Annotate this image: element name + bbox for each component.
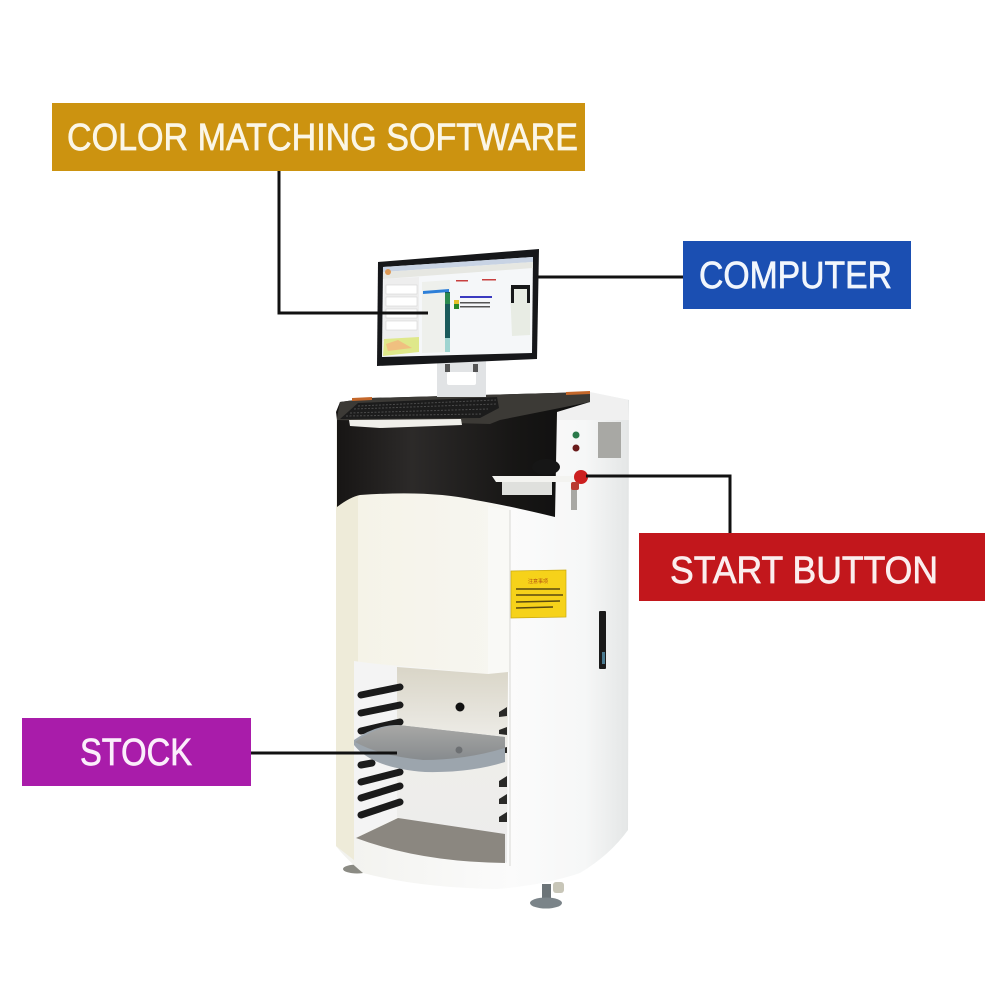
left body strip <box>336 495 358 860</box>
cabinet body <box>336 392 629 889</box>
label: computer <box>683 241 911 309</box>
label: computer: COMPUTER <box>699 255 892 297</box>
monitor <box>377 249 539 366</box>
right rack slots <box>499 707 507 822</box>
lower tray <box>356 818 505 863</box>
label: stock: STOCK <box>80 732 192 774</box>
left rack slots <box>361 687 400 815</box>
storage cavity <box>354 661 508 863</box>
label: stock <box>22 718 251 786</box>
machine cabinet <box>336 361 629 889</box>
door handle <box>599 611 606 669</box>
label: start button: START BUTTON <box>670 550 938 592</box>
vent panel <box>598 422 621 458</box>
label: color matching software: COLOR MATCHING SOFTWARE <box>67 117 578 159</box>
connector: software <box>279 171 428 313</box>
connector: computer <box>538 276 683 278</box>
software screen <box>382 257 533 357</box>
connector: stock <box>251 752 397 754</box>
start button <box>571 470 588 510</box>
keyboard <box>340 397 499 428</box>
label: start button <box>639 533 985 601</box>
warning label <box>511 570 566 618</box>
mouse shelf <box>492 459 580 495</box>
feet <box>343 864 564 908</box>
cavity hole <box>456 702 464 712</box>
black console <box>336 392 590 517</box>
stock tray <box>354 725 505 772</box>
console top <box>337 392 590 424</box>
warning label: 注意事项 <box>528 578 548 585</box>
label: color matching software <box>52 103 585 171</box>
connector: start button <box>586 476 730 533</box>
front door panel <box>358 493 510 674</box>
monitor stand <box>437 361 486 397</box>
right top panel <box>556 392 629 420</box>
indicator lights <box>572 432 580 452</box>
